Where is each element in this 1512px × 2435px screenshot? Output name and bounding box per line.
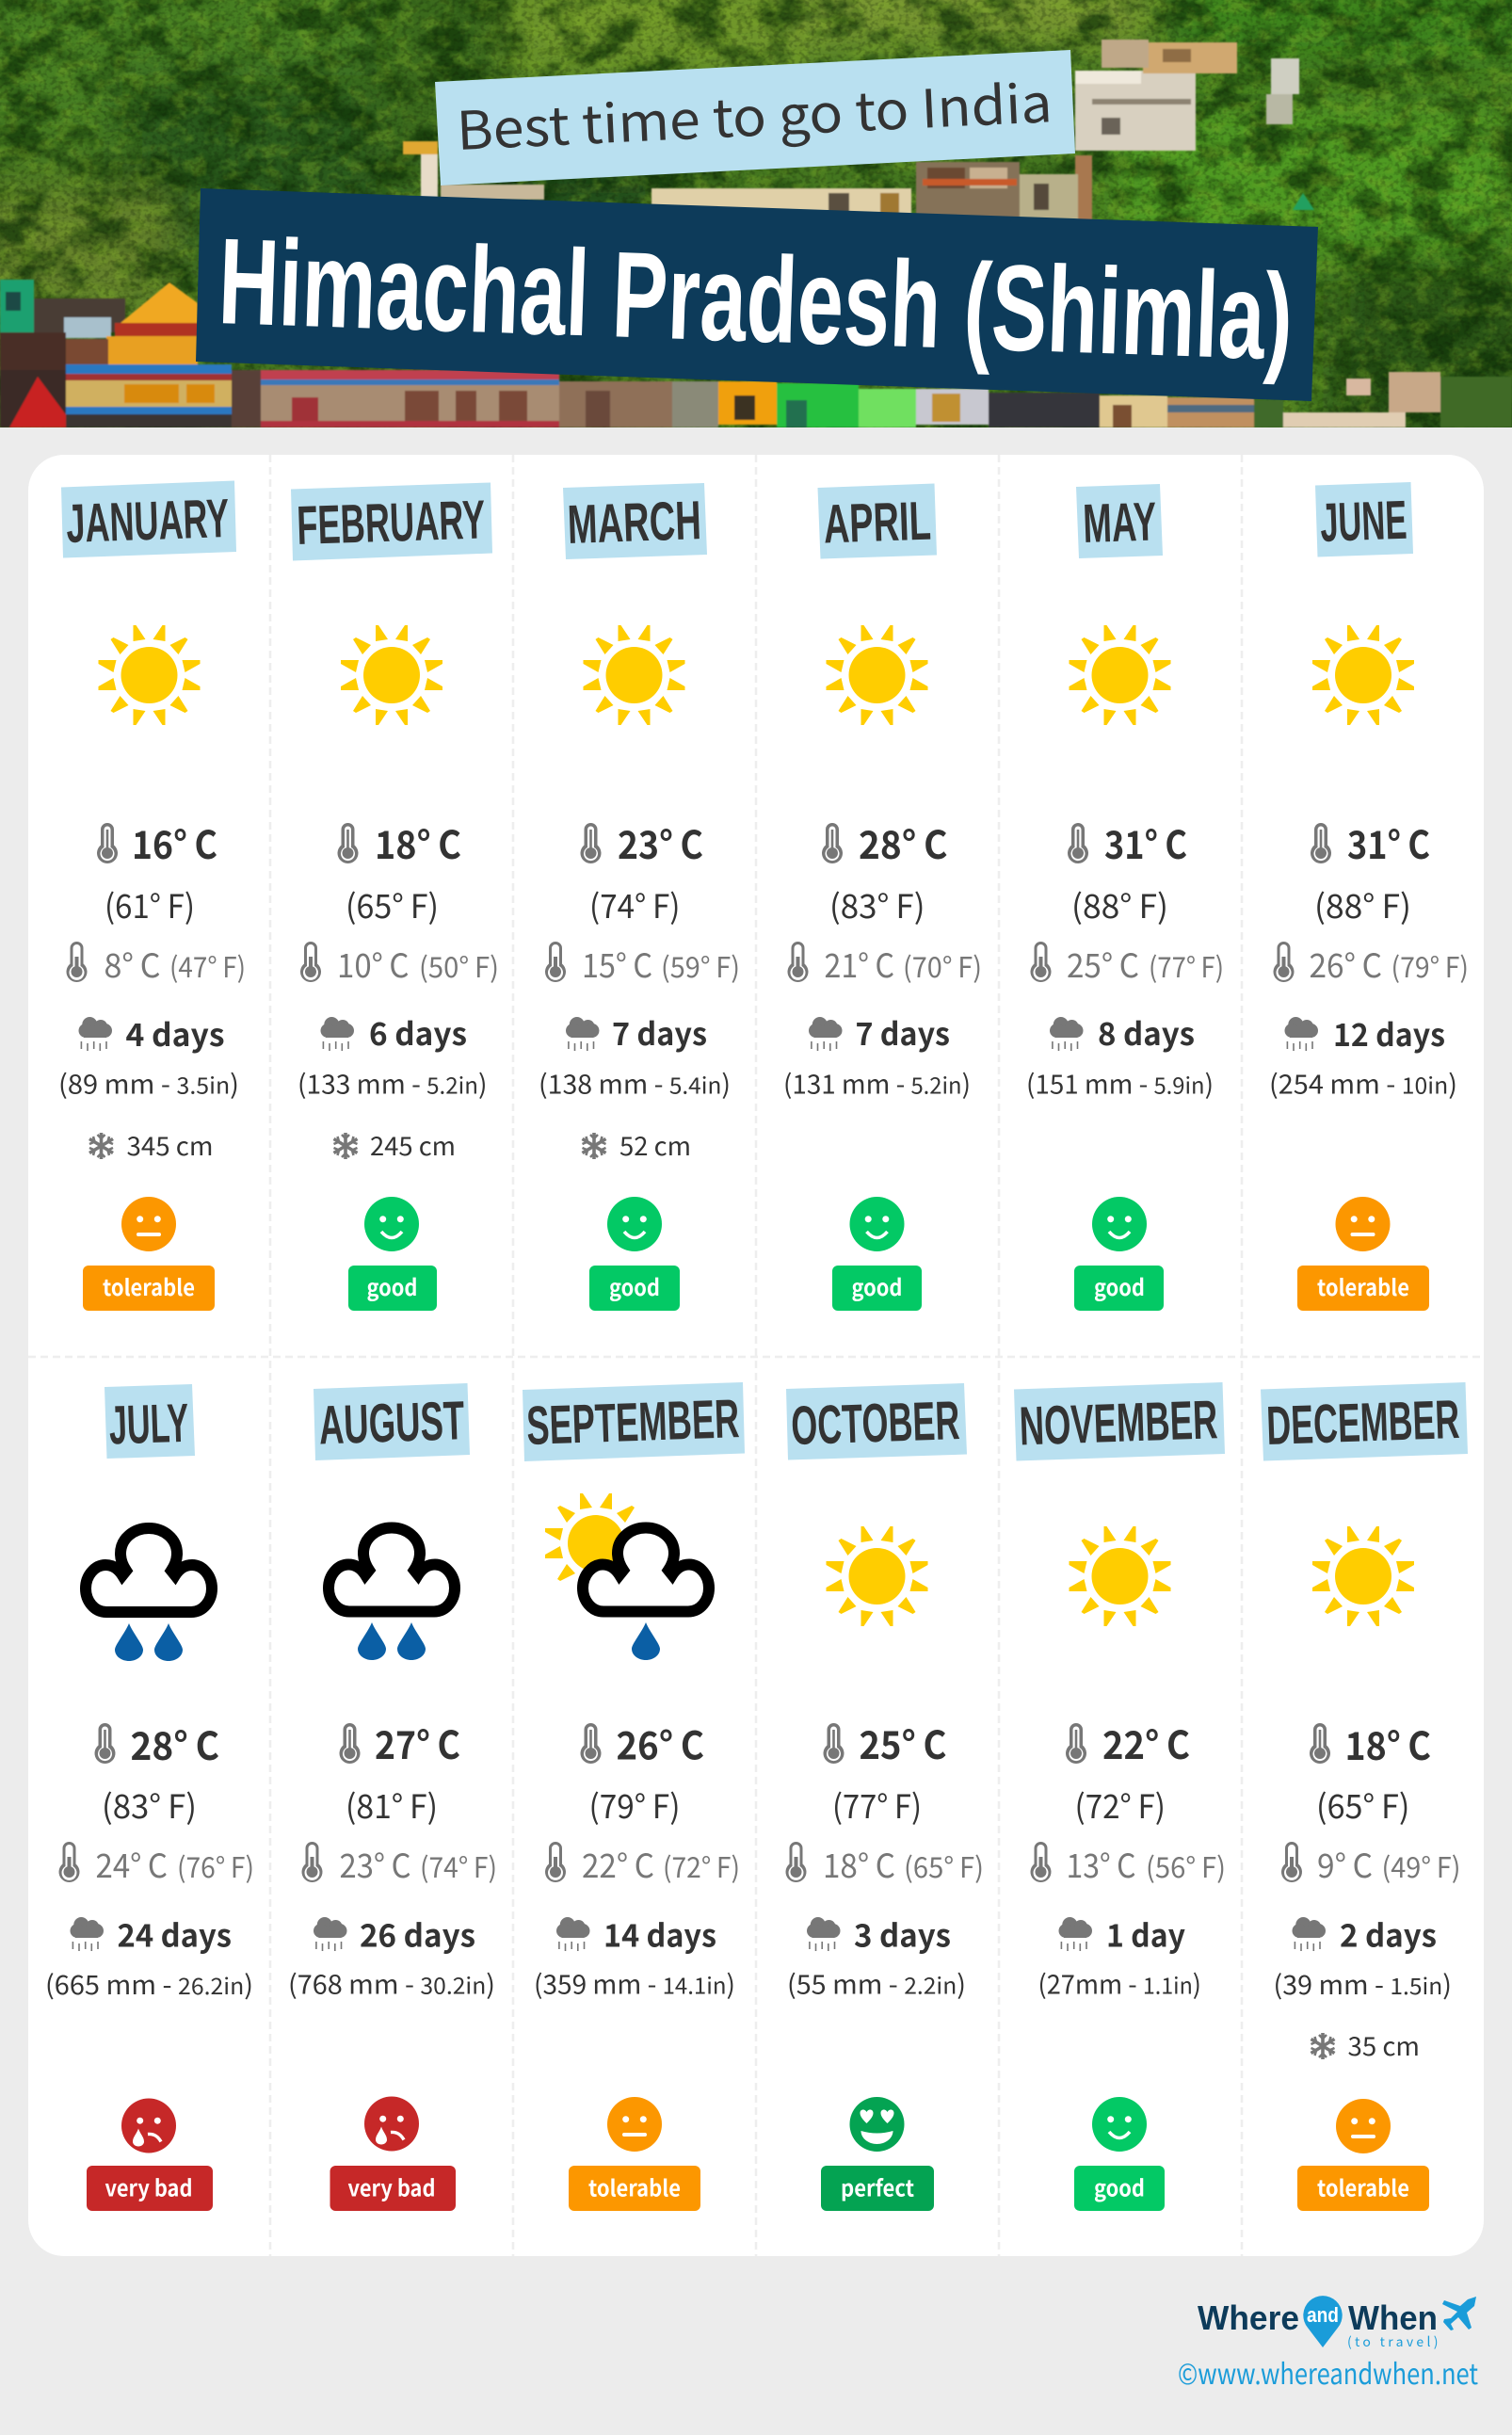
low temperature: 10° C xyxy=(337,940,409,988)
month label: FEBRUARY xyxy=(296,489,486,556)
rainfall: (665 mm - 26.2in) xyxy=(45,1965,253,2003)
low temperature xyxy=(785,1840,984,1888)
low temperature: (79° F) xyxy=(1391,944,1469,986)
high temperature xyxy=(337,814,461,928)
rainfall xyxy=(288,1911,495,2002)
rainfall: 24 days xyxy=(117,1911,232,1957)
low temperature: (72° F) xyxy=(663,1845,740,1886)
panel: March xyxy=(539,483,740,1311)
rainfall: 14 days xyxy=(603,1911,716,1957)
rating: tolerable xyxy=(1297,2099,1429,2211)
high temperature: (88° F) xyxy=(1314,880,1411,928)
high temperature: (81° F) xyxy=(346,1781,438,1829)
low temperature: 13° C xyxy=(1066,1840,1135,1888)
high temperature: 31° C xyxy=(1104,814,1187,870)
rating: tolerable: tolerable xyxy=(1317,1269,1409,1302)
panel: January xyxy=(58,480,246,1311)
logo: Where and When: (to travel) xyxy=(1347,2332,1439,2351)
rating: good xyxy=(589,1197,680,1311)
snowfall: 245 cm xyxy=(370,1126,456,1163)
low temperature: (77° F) xyxy=(1149,944,1224,986)
low temperature xyxy=(66,940,246,988)
high temperature: 18° C xyxy=(375,814,461,870)
rainfall xyxy=(58,1010,239,1102)
rating: good xyxy=(1074,1197,1164,1311)
high temperature: 27° C xyxy=(375,1714,460,1770)
rainfall: (27mm - 1.1in) xyxy=(1037,1964,1201,2002)
high temperature: (83° F) xyxy=(829,880,925,928)
month label: AUGUST xyxy=(318,1390,465,1456)
month label: SEPTEMBER xyxy=(525,1388,740,1457)
high temperature xyxy=(823,1714,947,1829)
icon: sun xyxy=(827,1526,928,1626)
month label xyxy=(817,484,937,559)
rainfall: (39 mm - 1.5in) xyxy=(1273,1965,1452,2003)
heading: subtitle ribbon xyxy=(435,50,1075,185)
low temperature: 15° C xyxy=(582,940,652,988)
rating: very bad: very bad xyxy=(105,2169,192,2203)
high temperature: 23° C xyxy=(618,814,703,870)
high temperature: 28° C xyxy=(130,1715,219,1771)
rating: good xyxy=(348,1197,437,1311)
panel: February xyxy=(291,482,499,1311)
low temperature xyxy=(300,940,499,988)
high temperature: (79° F) xyxy=(589,1781,680,1829)
month label xyxy=(1076,484,1163,558)
logo: Where and When xyxy=(1198,2296,1476,2351)
rainfall: (55 mm - 2.2in) xyxy=(787,1964,966,2002)
low temperature: (76° F) xyxy=(177,1845,254,1886)
low temperature: (65° F) xyxy=(904,1845,984,1886)
rainfall: (131 mm - 5.2in) xyxy=(783,1064,971,1102)
low temperature xyxy=(787,940,982,988)
low temperature: (59° F) xyxy=(661,944,740,986)
snowfall: 345 cm xyxy=(126,1126,213,1163)
rating: tolerable: tolerable xyxy=(1317,2169,1409,2203)
panel: November xyxy=(1014,1382,1226,2211)
high temperature xyxy=(1066,1714,1190,1829)
panel: October xyxy=(785,1383,984,2211)
rainfall: 2 days xyxy=(1340,1911,1437,1957)
header photo: Himachal hillside town xyxy=(0,0,1512,443)
month label xyxy=(1315,482,1413,557)
low temperature: (56° F) xyxy=(1146,1845,1226,1886)
bottom row of houses xyxy=(261,370,559,379)
high temperature: (72° F) xyxy=(1075,1781,1166,1829)
low temperature xyxy=(58,1840,254,1888)
panel: May xyxy=(1026,484,1224,1311)
rating: perfect: perfect xyxy=(841,2169,914,2203)
month label: JULY xyxy=(108,1393,189,1456)
low temperature xyxy=(1030,1840,1226,1888)
icon: rain cloud with two drops xyxy=(86,1528,212,1661)
rainfall xyxy=(298,1009,488,1102)
icon: sun xyxy=(98,625,200,725)
panel: July xyxy=(45,1384,254,2211)
rating: tolerable xyxy=(1297,1197,1429,1311)
rainfall xyxy=(1269,1010,1457,1102)
high temperature: (88° F) xyxy=(1071,880,1168,928)
high temperature xyxy=(1068,814,1187,928)
rainfall xyxy=(783,1009,971,1102)
month label: JUNE xyxy=(1319,490,1407,554)
rainfall: 3 days xyxy=(854,1911,951,1957)
rainfall xyxy=(1273,1911,1452,2003)
high temperature: 28° C xyxy=(859,814,947,870)
high temperature xyxy=(97,814,217,928)
rainfall: (768 mm - 30.2in) xyxy=(288,1964,495,2002)
rating: good xyxy=(832,1197,922,1311)
rainfall: (359 mm - 14.1in) xyxy=(534,1964,735,2002)
low temperature: 9° C xyxy=(1317,1840,1373,1888)
rating: good: good xyxy=(1094,1269,1145,1302)
rainfall xyxy=(534,1911,735,2002)
high temperature xyxy=(822,814,947,928)
high temperature: 22° C xyxy=(1102,1714,1190,1770)
rainfall: 4 days xyxy=(126,1010,224,1056)
low temperature: (49° F) xyxy=(1382,1845,1461,1886)
high temperature: (61° F) xyxy=(105,880,195,928)
snowfall xyxy=(582,1126,691,1163)
month label xyxy=(314,1383,470,1460)
rating: tolerable xyxy=(569,2097,700,2211)
low temperature: 23° C xyxy=(339,1840,410,1888)
high temperature xyxy=(580,814,703,928)
icon: sun xyxy=(341,625,442,725)
rainfall: 6 days xyxy=(369,1009,467,1055)
rainfall: 8 days xyxy=(1098,1009,1195,1055)
rainfall xyxy=(787,1911,966,2002)
icon: map pin xyxy=(1303,2296,1343,2347)
low temperature xyxy=(1030,940,1224,988)
rainfall: 26 days xyxy=(360,1911,475,1957)
rainfall: (151 mm - 5.9in) xyxy=(1026,1064,1214,1102)
icon: sun xyxy=(1312,1526,1414,1626)
high temperature: (74° F) xyxy=(589,880,680,928)
low temperature xyxy=(545,940,740,988)
month label xyxy=(786,1383,967,1459)
icon: sun xyxy=(1070,1526,1171,1626)
rainfall: (254 mm - 10in) xyxy=(1269,1064,1457,1102)
panel: August xyxy=(288,1383,497,2211)
high temperature xyxy=(1310,1715,1431,1829)
month label xyxy=(291,482,492,561)
icon: sun behind rain cloud with one drop xyxy=(545,1493,709,1660)
low temperature: 22° C xyxy=(582,1840,654,1888)
high temperature xyxy=(580,1714,704,1829)
month label xyxy=(523,1382,745,1461)
rainfall xyxy=(1037,1911,1201,2002)
low temperature xyxy=(545,1840,740,1888)
high temperature: 18° C xyxy=(1344,1715,1431,1771)
low temperature: (74° F) xyxy=(420,1845,497,1886)
heading: subtitle ribbon: Best time to go to India xyxy=(455,61,1054,166)
panel: April xyxy=(783,484,982,1311)
low temperature: 24° C xyxy=(96,1840,168,1888)
rating: perfect xyxy=(821,2097,934,2211)
low temperature: 21° C xyxy=(825,940,894,988)
temple spire and white house above the banner xyxy=(403,141,438,154)
low temperature: 25° C xyxy=(1067,940,1139,988)
month label: NOVEMBER xyxy=(1019,1389,1218,1457)
rating: tolerable xyxy=(83,1197,215,1311)
high temperature: (65° F) xyxy=(346,880,439,928)
rating: tolerable: tolerable xyxy=(103,1269,195,1302)
rainfall: (89 mm - 3.5in) xyxy=(58,1064,239,1102)
high temperature xyxy=(94,1715,219,1829)
rainfall: 1 day xyxy=(1106,1911,1185,1957)
rating: very bad xyxy=(87,2098,213,2211)
snowfall: 35 cm xyxy=(1348,2026,1420,2063)
rating: good: good xyxy=(851,1269,902,1302)
month label: OCTOBER xyxy=(790,1390,960,1457)
panel: June xyxy=(1269,482,1469,1311)
low temperature: 8° C xyxy=(104,940,160,988)
rainfall: (133 mm - 5.2in) xyxy=(298,1064,488,1102)
icon: sun xyxy=(827,625,928,725)
high temperature: 31° C xyxy=(1347,814,1430,870)
snowfall xyxy=(89,1126,213,1163)
low temperature: 26° C xyxy=(1309,940,1382,988)
rating: very bad xyxy=(330,2096,456,2211)
rainfall: 7 days xyxy=(855,1009,950,1055)
month label: APRIL xyxy=(823,491,932,555)
month label xyxy=(105,1384,195,1459)
month label xyxy=(61,480,236,557)
panel: December xyxy=(1261,1382,1468,2211)
panel: September xyxy=(523,1382,745,2211)
logo: Where and When: Where xyxy=(1198,2298,1299,2337)
left temple and houses xyxy=(0,280,34,332)
low temperature: (50° F) xyxy=(419,944,499,986)
rainfall: (138 mm - 5.4in) xyxy=(539,1064,731,1102)
month label xyxy=(1014,1382,1225,1461)
month label: JANUARY xyxy=(65,488,230,555)
panel: months card xyxy=(28,455,1484,2256)
icon: sun xyxy=(584,625,685,725)
high temperature: (65° F) xyxy=(1316,1781,1410,1829)
month label xyxy=(563,483,707,559)
rating: very bad: very bad xyxy=(348,2169,435,2203)
high temperature xyxy=(339,1714,460,1829)
month label: MAY xyxy=(1082,491,1157,555)
snowfall xyxy=(1311,2026,1420,2063)
icon: sun xyxy=(1312,625,1414,725)
high temperature: (77° F) xyxy=(832,1781,922,1829)
month label: MARCH xyxy=(567,490,702,556)
rainfall: 7 days xyxy=(612,1009,707,1055)
low temperature: (70° F) xyxy=(903,944,982,986)
rating: good xyxy=(1074,2097,1165,2211)
logo: Where and When: When xyxy=(1348,2298,1438,2337)
rainfall xyxy=(539,1009,731,1102)
rating: good: good xyxy=(367,1269,418,1302)
icon: airplane xyxy=(1442,2297,1476,2330)
top-right hillside buildings xyxy=(1075,71,1196,151)
rainfall xyxy=(1026,1009,1214,1102)
low temperature xyxy=(1281,1840,1461,1888)
high temperature: (83° F) xyxy=(102,1781,197,1829)
high temperature xyxy=(1311,814,1430,928)
high temperature: 26° C xyxy=(616,1714,704,1770)
high temperature: 16° C xyxy=(132,814,217,870)
central buildings xyxy=(651,188,911,215)
snowfall: 52 cm xyxy=(619,1126,691,1163)
snowfall xyxy=(333,1126,456,1163)
rainfall xyxy=(45,1911,253,2003)
low temperature xyxy=(301,1840,497,1888)
low temperature: 18° C xyxy=(823,1840,895,1888)
high temperature: 25° C xyxy=(859,1714,947,1770)
icon: sun xyxy=(1070,625,1171,725)
rating: good: good xyxy=(1094,2169,1145,2203)
icon: map pin: and xyxy=(1307,2303,1339,2327)
rating: tolerable: tolerable xyxy=(588,2169,681,2203)
rainfall: 12 days xyxy=(1333,1010,1445,1056)
icon: rain cloud with two drops xyxy=(329,1527,455,1660)
low temperature xyxy=(1273,940,1469,988)
rating: good: good xyxy=(609,1269,660,1302)
low temperature: (47° F) xyxy=(169,944,246,986)
